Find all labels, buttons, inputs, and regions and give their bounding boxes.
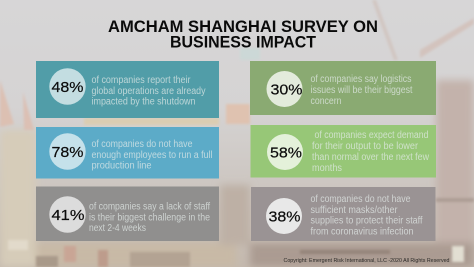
text: 30% description: concern — [310, 96, 342, 107]
stat circle: 58% — [267, 134, 303, 170]
text: 38% description: sufficient masks/other — [310, 205, 398, 216]
title: AMCHAM SHANGHAI SURVEY ON — [108, 17, 378, 36]
panel: 78% employees — [36, 127, 219, 178]
text: 41% description: is their biggest challenge in the — [89, 212, 210, 224]
text: 41% description: of companies say a lack of staff — [89, 202, 210, 212]
stat circle: 48% — [49, 68, 86, 105]
stat circle: 41%: 41% — [52, 208, 85, 224]
text: 78% description — [92, 139, 212, 172]
stat circle: 78% — [49, 133, 86, 170]
text: 58% description: months — [312, 163, 342, 174]
copyright note: Copyright: Emergent Risk International, LLC -2020 All Rights Reserved — [284, 258, 450, 264]
text: 38% description: from coronavirus infection — [310, 226, 414, 238]
text: 48% description: global operations are already — [92, 86, 206, 97]
text: 41% description: next 2-4 weeks — [89, 223, 146, 234]
text: 58% description — [312, 130, 430, 174]
text: 30% description: issues will be their biggest — [310, 85, 413, 96]
text: 38% description: of companies do not have — [310, 194, 411, 205]
text: 58% description: of companies expect demand — [314, 130, 428, 141]
text: 48% description — [92, 75, 206, 108]
text: 78% description: production line — [92, 160, 152, 172]
panel: 30% logistics — [250, 61, 436, 115]
text: 48% description: of companies report their — [92, 75, 191, 86]
stat circle: 48%: 48% — [52, 80, 84, 96]
text: 48% description: impacted by the shutdown — [92, 96, 196, 108]
stat circle: 41% — [49, 196, 86, 233]
panel: 48% global operations — [36, 61, 219, 118]
text: 41% description — [89, 202, 210, 234]
panel: 38% masks — [251, 187, 436, 241]
stat circle: 30%: 30% — [270, 82, 303, 98]
text: 30% description: of companies say logistics — [310, 74, 412, 85]
stat circle: 58%: 58% — [270, 146, 302, 162]
stat circle: 78%: 78% — [52, 145, 84, 161]
panel: 41% lack of staff — [36, 186, 219, 241]
text: 30% description — [310, 74, 413, 107]
stat circle: 38%: 38% — [268, 210, 301, 226]
title — [108, 17, 378, 52]
title: BUSINESS IMPACT — [170, 32, 317, 52]
text: 78% description: of companies do not have — [92, 139, 193, 150]
stat circle: 30% — [266, 71, 303, 107]
text: 78% description: enough employees to run a full — [92, 150, 212, 161]
stat circle: 38% — [266, 198, 302, 234]
text: 38% description: supplies to protect their staff — [310, 216, 423, 226]
text: 58% description: than normal over the next few — [312, 152, 430, 163]
text: 38% description — [310, 194, 423, 238]
panel: 58% demand — [250, 125, 436, 178]
text: 58% description: for their output to be lower — [312, 141, 419, 152]
